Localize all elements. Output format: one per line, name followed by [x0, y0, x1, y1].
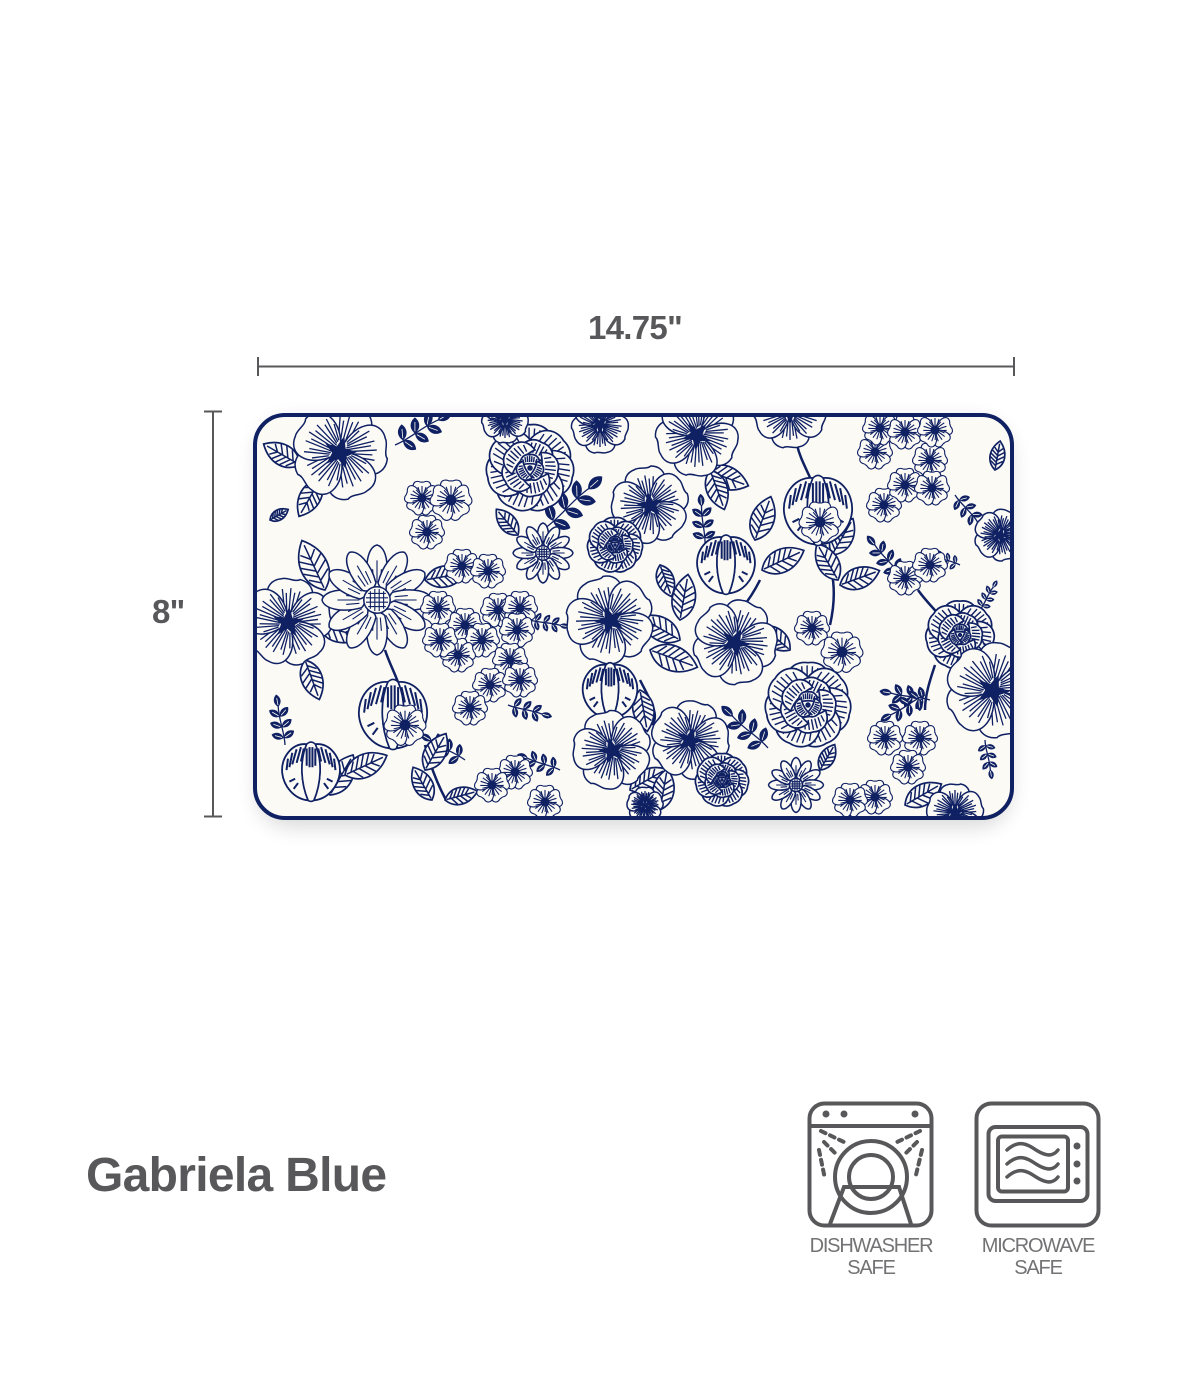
icon: dishwasher safe: [808, 1102, 934, 1228]
label: dishwasher safe: DISHWASHER: [810, 1235, 932, 1257]
plate surface: [255, 415, 1012, 818]
plate: blue floral rectangular platter: [250, 413, 1018, 834]
label: dishwasher safe: SAFE: [847, 1257, 895, 1279]
plate shadow: [258, 422, 1010, 826]
height dimension label: 8": [152, 593, 185, 630]
icon: microwave safe: [974, 1102, 1100, 1228]
product name: Gabriela Blue: [86, 1149, 386, 1202]
height dimension line: [204, 410, 222, 818]
label: microwave safe: SAFE: [1014, 1257, 1062, 1279]
label: microwave safe: [982, 1235, 1095, 1279]
floral pattern: [253, 417, 1014, 816]
width dimension label: 14.75": [588, 309, 682, 346]
width dimension line: [257, 357, 1015, 376]
label: microwave safe: MICROWAVE: [982, 1235, 1094, 1257]
plate rim: [255, 415, 1012, 818]
label: dishwasher safe: [810, 1235, 932, 1279]
